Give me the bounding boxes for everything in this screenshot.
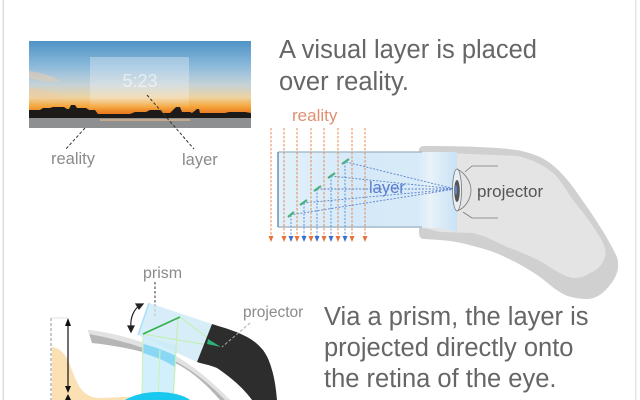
label: prism: prism	[143, 265, 182, 282]
reality rays	[271, 128, 365, 237]
page frame right edge	[635, 0, 636, 400]
heading: visual layer: A visual layer is placed	[279, 36, 537, 64]
heading: prism: the retina of the eye.	[324, 365, 556, 393]
leader: prism	[154, 282, 156, 318]
heading: prism: projected directly onto	[324, 334, 573, 362]
overlay layer panel	[90, 57, 189, 110]
label: layer: layer	[182, 151, 218, 169]
projector leader line	[222, 323, 250, 347]
eye cornea	[125, 392, 190, 400]
eyeglass lens band	[88, 330, 230, 400]
overlay clock: 5:23	[122, 71, 158, 91]
projected blue rays	[290, 162, 455, 237]
label: projector bottom: projector	[243, 304, 303, 321]
measure arrow	[65, 318, 71, 400]
ray arrowheads	[268, 236, 368, 242]
diagram: glass arm	[278, 146, 618, 299]
leader: layer	[147, 95, 194, 149]
dashed face limit	[51, 318, 68, 400]
mirrors	[288, 159, 349, 217]
projector lens	[452, 166, 498, 218]
label: reality top: reality	[292, 106, 338, 125]
photo: skyline with visual layer	[29, 41, 251, 128]
heading: prism: Via a prism, the layer is	[324, 303, 589, 331]
prism block	[138, 303, 220, 400]
page frame left edge	[2, 0, 4, 400]
light guide	[278, 152, 457, 232]
label: layer in beam: layer	[369, 179, 405, 197]
light column to eye	[142, 335, 176, 400]
heading: visual layer: over reality.	[279, 68, 409, 96]
rotation arrow	[128, 304, 143, 332]
face profile	[52, 347, 135, 400]
label: reality: reality	[51, 150, 96, 168]
leader: reality	[65, 128, 85, 150]
projector arm black	[197, 324, 277, 400]
label: projector: projector	[477, 182, 543, 201]
